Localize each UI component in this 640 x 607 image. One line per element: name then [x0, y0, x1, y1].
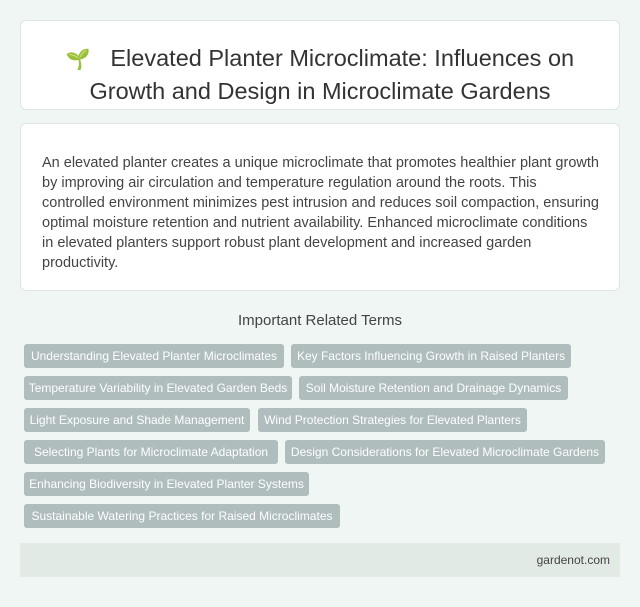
- description card: [20, 123, 620, 291]
- description text: An elevated planter creates a unique microclimate that promotes healthier plant growth: [42, 155, 599, 171]
- tags: Selecting Plants for Microclimate Adaptation: [34, 445, 268, 459]
- tags: Understanding Elevated Planter Microclimates: [31, 349, 277, 363]
- tags: Soil Moisture Retention and Drainage Dynamics: [306, 381, 561, 395]
- description text: optimal moisture retention and nutrient availability. Enhanced microclimate conditions: [42, 215, 587, 231]
- description text: in elevated planters support robust plant development and increased garden: [42, 235, 531, 251]
- footer source text: gardenot.com: [537, 553, 610, 567]
- tags: Enhancing Biodiversity in Elevated Planter Systems: [29, 477, 304, 491]
- tags: Wind Protection Strategies for Elevated Planters: [264, 413, 521, 427]
- tags: Temperature Variability in Elevated Garden Beds: [29, 381, 287, 395]
- section heading: Important Related Terms: [238, 312, 402, 329]
- header card: [20, 20, 620, 110]
- title: [66, 45, 574, 104]
- title: 🌱 Elevated Planter Microclimate: Influences on: [66, 45, 574, 71]
- tags: Sustainable Watering Practices for Raised Microclimates: [31, 509, 332, 523]
- description text: [42, 155, 599, 271]
- tags: Key Factors Influencing Growth in Raised Planters: [297, 349, 565, 363]
- description text: productivity.: [42, 255, 118, 271]
- footer: [20, 543, 620, 577]
- description text: controlled environment minimizes pest intrusion and reduces soil compaction, ensuring: [42, 195, 599, 211]
- tags: Light Exposure and Shade Management: [30, 413, 244, 427]
- description text: by improving air circulation and temperature regulation around the roots. This: [42, 175, 537, 191]
- tags: Design Considerations for Elevated Microclimate Gardens: [291, 445, 599, 459]
- title: Growth and Design in Microclimate Gardens: [89, 78, 551, 104]
